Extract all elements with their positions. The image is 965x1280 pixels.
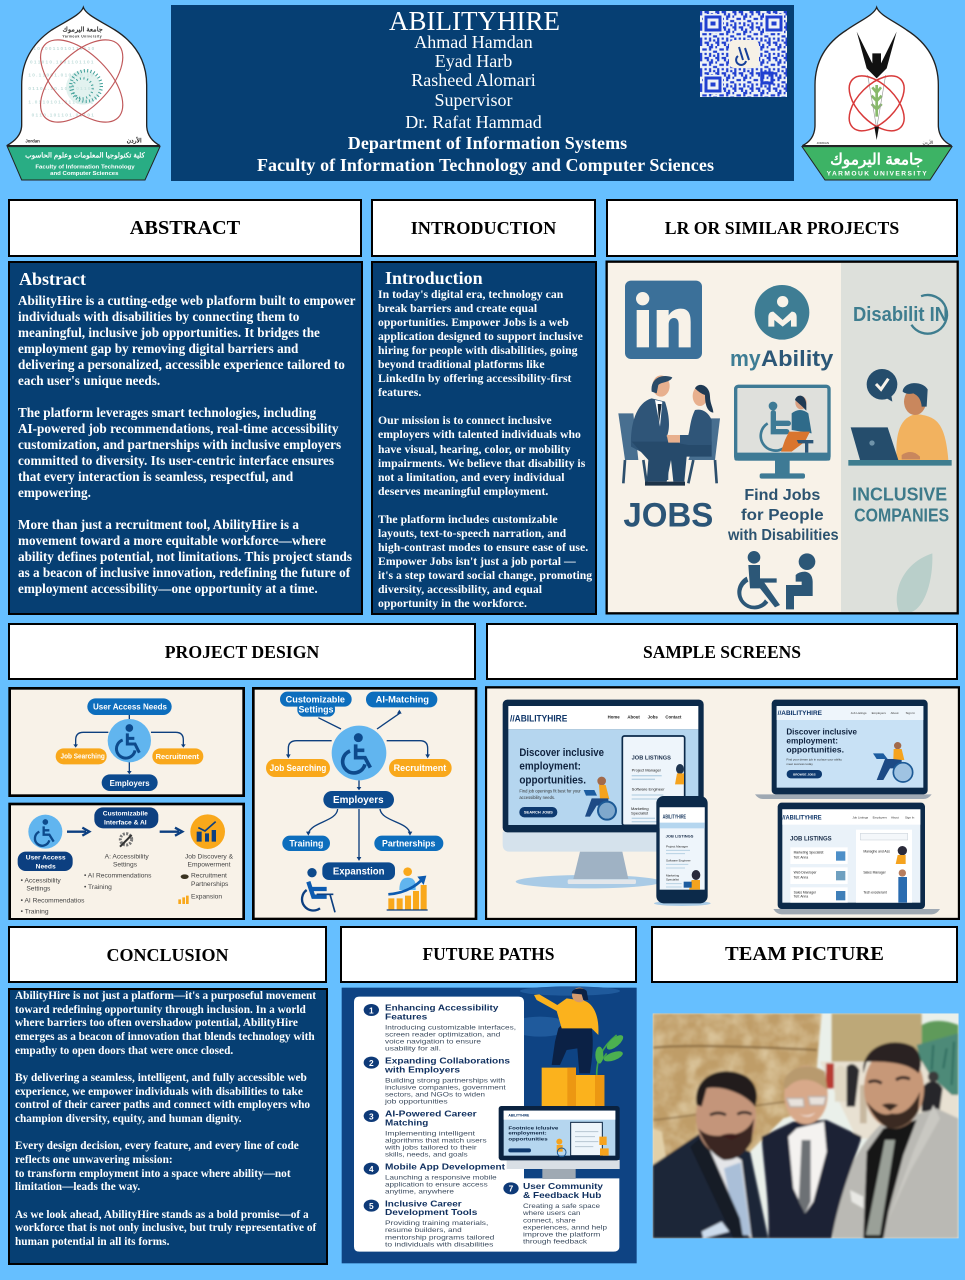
- item 7: community hub: User Community: [523, 1181, 603, 1191]
- panel: abstract text: [8, 261, 363, 615]
- item 3: AI matching: algorithms that match users: [385, 1137, 487, 1144]
- diagram: full feature map: Expanstion: [333, 867, 385, 878]
- desktop monitor mockup: JOB LISTINGS: [632, 756, 671, 762]
- icon: gear and wrench: [120, 834, 132, 845]
- phone mockup: Software Engineer: [666, 859, 691, 863]
- second laptop mockup: Tell: Anna: [794, 855, 808, 859]
- second laptop mockup: Tech excelerant: [863, 891, 887, 895]
- heading: future paths: [340, 926, 637, 983]
- item 4: mobile app: application to ensure access: [385, 1182, 488, 1189]
- diagram: full feature map: Employers: [333, 795, 384, 806]
- heading: introduction: [371, 199, 596, 257]
- logo: faculty emblem: جامعة اليرموك: [62, 26, 103, 34]
- heading: project design: PROJECT DESIGN: [165, 642, 319, 662]
- heading: conclusion: CONCLUSION: [106, 945, 229, 965]
- heading: conclusion: [8, 926, 327, 983]
- logo: faculty emblem: Faculty of Information Technology: [35, 164, 135, 170]
- item 7: community hub: experiences, annd help: [523, 1225, 607, 1232]
- item 1: accessibility features: screen reader optimization, and: [385, 1031, 501, 1038]
- heading: project design: [8, 623, 476, 680]
- header banner: [171, 5, 794, 181]
- panel: conclusion text: [8, 988, 328, 1265]
- heading: sample screens: [486, 623, 958, 680]
- label: find jobs for people with disabilities: [727, 487, 839, 544]
- diagram: three-step flow: • AI Recommendatios: [21, 897, 85, 904]
- logo: faculty emblem: الأردن: [127, 135, 142, 144]
- authors and supervisor: Supervisor: [434, 90, 512, 110]
- wheelchair user: [597, 777, 606, 785]
- phone mockup: ABILITYHIRE: [663, 815, 686, 821]
- desktop monitor mockup: Home: [608, 714, 620, 719]
- background building and courtyard: [832, 1013, 922, 1063]
- conclusion body: AbilityHire is not just a platform—it's a purposeful movement toward redefining opportunity through inclusion. In a world where barriers too often overshadow potential, AbilityHire emerges as a beacon of innovation that blends technology with empathy to open doors that were once closed. By delivering a seamless, intelligent, and fully accessible web experience, we empower individuals with disabilities to take control of their career paths and connect with employers who champion diversity, equity, and human dignity. Every design decision, every feature, and every line of code reflects one unwavering mission: to transform employment into a space where ability—not limitation—leads the way. As we look ahead, AbilityHire stands as a bold promise—of a workforce that is not only inclusive, but truly representative of human potential in all its forms.: [15, 990, 316, 1248]
- desktop monitor mockup: Jobs: [648, 714, 658, 719]
- item 1: accessibility features: Introducing customizable interfaces,: [385, 1024, 516, 1031]
- introduction body: In today's digital era, technology can break barriers and create equal opportunities. Empower Jobs is a web application designed to support inclusive hiring for people with disabilities, going beyond traditional platforms like LinkedIn by offering accessibility-first features. Our mission is to connect inclusive employers with talented individuals who have visual, hearing, color, or mobility impairments. We believe that disability is not a limitation, and every individual deserves meaningful employment. The platform includes customizable layouts, text-to-speech narration, and high-contrast modes to ensure ease of use. Empower Jobs isn't just a job portal — it's a step toward social change, promoting diversity, accessibility, and equal opportunity in the workforce.: [378, 288, 592, 610]
- diagram: full feature map: Recruitment: [394, 763, 446, 773]
- diagram: three-step flow: Recruitment: [191, 873, 227, 880]
- item 4: mobile app: 4: [369, 1164, 374, 1174]
- stone wall: [653, 1013, 827, 1165]
- heading: introduction: INTRODUCTION: [411, 218, 556, 238]
- white list card: [354, 997, 619, 1252]
- authors and supervisor: [405, 32, 542, 132]
- logo: faculty emblem: 0 1 1 0 1 . 1 0 . 1 0 0 1 0 1 1 0 1: [28, 86, 95, 91]
- label: find jobs for people with disabilities: with Disabilities: [727, 527, 839, 544]
- future paths infographic: [342, 986, 637, 1264]
- desktop monitor mockup: accessibility needs.: [519, 795, 555, 800]
- red orbits: [839, 66, 914, 141]
- logo: faculty emblem: 0 1 1 0 . 1 0 1 1 0 1 . 0 1 1 0 1: [32, 113, 94, 118]
- middle man: [762, 1120, 862, 1238]
- laptop mockup: About: [891, 711, 899, 715]
- diagram: three-step flow: Empowerment: [188, 862, 231, 869]
- diagram: three-step flow: Partnerships: [191, 881, 229, 888]
- laptop mockup: Discover inclusive: [786, 728, 858, 737]
- item 7: community hub: [503, 1181, 607, 1246]
- logo: faculty emblem: [6, 5, 161, 180]
- logo: faculty emblem: 1 . 0 1 1 0 1 0 1 . 0 1 1 0 1 0 . 1: [28, 99, 93, 104]
- laptop mockup: [755, 700, 932, 799]
- desktop monitor mockup: SEARCH JOBS: [524, 810, 553, 815]
- item 2: collaborations: job opportunities: [384, 1099, 449, 1106]
- item 5: career tools: Inclusive Career: [385, 1198, 462, 1208]
- diagram: full feature map: AI-Matching: [376, 694, 429, 704]
- torch: [857, 32, 897, 78]
- second laptop mockup: Marketing Specialist: [794, 850, 824, 854]
- label: find jobs for people with disabilities: Find Jobs: [744, 487, 820, 504]
- item 5: career tools: Development Tools: [385, 1207, 478, 1217]
- atom orbits: [26, 26, 137, 136]
- icon: wheelchair: [116, 726, 139, 758]
- label: inclusive companies: INCLUSIVE: [852, 485, 947, 505]
- item 4: mobile app: Mobile App Development: [385, 1161, 505, 1171]
- diagram: three-step flow: Settings: [113, 862, 138, 869]
- department and faculty: Faculty of Information Technology and Computer Sciences: [257, 155, 714, 175]
- item 7: community hub: 7: [509, 1184, 514, 1194]
- diagram: three-step flow: • Accessibility: [21, 878, 61, 885]
- item 1: accessibility features: Features: [385, 1011, 428, 1021]
- second laptop mockup: Web Developer: [794, 870, 817, 874]
- phone mockup: JOB LISTINGS: [666, 834, 694, 839]
- phone mockup: [654, 796, 711, 906]
- item 2: collaborations: inclusive companies, government: [385, 1084, 506, 1091]
- laptop mockup: meet success today: [786, 762, 813, 766]
- phone mockup: Project Manager: [666, 844, 688, 848]
- authors and supervisor: Eyad Harb: [435, 51, 512, 71]
- department and faculty: Department of Information Systems: [348, 133, 627, 153]
- heading: sample screens: SAMPLE SCREENS: [643, 642, 801, 662]
- illustration: monitor with wheelchair user: [734, 386, 830, 479]
- diagram: three-step flow: • Training: [84, 884, 112, 891]
- item 1: accessibility features: 1: [369, 1005, 374, 1015]
- label: find jobs for people with disabilities: for People: [741, 507, 824, 524]
- second laptop mockup: About: [891, 816, 899, 820]
- item 4: mobile app: anytime, anywhere: [385, 1189, 454, 1196]
- item 3: AI matching: Matching: [385, 1117, 428, 1127]
- item 5: career tools: mentorship programs tailored: [385, 1234, 495, 1241]
- item 3: AI matching: Implementing intelligent: [385, 1130, 475, 1137]
- diagram: three-step flow: Needs: [36, 864, 56, 871]
- logo: Yarmouk University emblem: [801, 5, 953, 180]
- item 4: mobile app: Launching a responsive mobile: [385, 1174, 497, 1181]
- illustration: person on podium: [534, 988, 625, 1107]
- desktop monitor mockup: Contact: [665, 714, 682, 719]
- logo: faculty emblem: Yarmouk University: [62, 34, 102, 38]
- icon: leaf: [897, 553, 932, 612]
- label: inclusive companies: COMPANIES: [854, 506, 949, 526]
- item 5: career tools: to individuals with disabilities: [385, 1242, 494, 1249]
- diagram: three-step flow: Job Discovery &: [185, 853, 234, 860]
- diagram: three-step flow: • AI Recommendations: [84, 873, 152, 880]
- DisabilityIN logo: Disabilit IN: [853, 304, 948, 326]
- heading: future paths: FUTURE PATHS: [422, 944, 555, 964]
- diagram: three-step flow: A: Accessibility: [105, 853, 149, 860]
- diagram: three-step flow: Interface & AI: [104, 819, 147, 826]
- diagram: full feature map: Customizable: [286, 694, 345, 704]
- item 1: accessibility features: [364, 1002, 516, 1053]
- diagram: three-step flow: Expansion: [191, 893, 222, 900]
- second laptop mockup: Managhe and Ass: [863, 850, 890, 854]
- diagram: full feature map: Job Searching: [270, 763, 327, 773]
- heading: team picture: [651, 926, 958, 983]
- project title: ABILITYHIRE: [389, 6, 560, 36]
- laptop mockup: Sign In: [906, 711, 915, 715]
- second laptop mockup: Tell: Anna: [794, 895, 808, 899]
- authors and supervisor: Dr. Rafat Hammad: [405, 112, 542, 132]
- panel: similar projects illustration: [606, 260, 959, 614]
- item 7: community hub: Creating a safe space: [523, 1203, 600, 1210]
- desktop monitor mockup: Marketing: [631, 806, 649, 811]
- department and faculty: [257, 133, 714, 175]
- phone mockup: Specialist: [666, 877, 679, 881]
- myAbility logo: [730, 285, 834, 371]
- item 3: AI matching: skills, needs, and goals: [385, 1152, 468, 1159]
- icon: wheelchair user at desk: [302, 868, 335, 912]
- diagram: three-step flow: Customizabile: [103, 810, 148, 817]
- item 2: collaborations: [364, 1055, 510, 1106]
- authors and supervisor: Rasheed Alomari: [411, 70, 536, 90]
- illustration: monitor: Footnice iclusive: [508, 1126, 559, 1132]
- QR code: [700, 11, 787, 97]
- second laptop mockup: Sales Manager: [794, 890, 817, 894]
- item 7: community hub: through feedback: [523, 1239, 588, 1246]
- authors and supervisor: Ahmad Hamdan: [414, 32, 533, 52]
- item 3: AI matching: with jobs tailored to their: [384, 1145, 478, 1152]
- label: inclusive companies: [852, 485, 949, 526]
- desktop monitor mockup: employment:: [519, 761, 581, 773]
- wheat stem: [872, 85, 882, 117]
- diagram: small flow: Recruitment: [156, 752, 199, 761]
- sample screens mockups: [485, 686, 960, 920]
- heading: LR or similar projects: [606, 199, 958, 257]
- laptop mockup: BROWSE JOBS: [793, 772, 816, 776]
- desktop monitor mockup: [503, 700, 704, 888]
- desktop monitor mockup: About: [627, 714, 640, 719]
- item 7: community hub: & Feedback Hub: [523, 1190, 601, 1200]
- right man: [833, 1108, 958, 1238]
- desktop monitor mockup: Find job openings fit best for your: [519, 789, 581, 794]
- illustration: monitor: ABILITYHIRE: [508, 1113, 530, 1117]
- item 7: community hub: improve the platform: [523, 1232, 601, 1239]
- logo: faculty emblem: 1 0 . 1 1 0 0 1 . 0 1 0 1 1 0 . 1 0: [28, 73, 93, 78]
- illustration: monitor: [499, 1106, 620, 1179]
- item 1: accessibility features: usability for all.: [385, 1046, 441, 1053]
- second laptop mockup: Job Listings: [852, 816, 869, 820]
- item 2: collaborations: sectors, and NGOs to widen: [385, 1092, 485, 1099]
- laptop mockup: employment:: [786, 736, 838, 745]
- label: JOBS: JOBS: [623, 497, 713, 535]
- LinkedIn logo: [625, 281, 702, 359]
- icon: wheelchair user and seated person: [737, 551, 815, 609]
- item 3: AI matching: 3: [369, 1111, 374, 1121]
- illustration: job interview: [618, 375, 720, 486]
- item 7: community hub: where users can: [522, 1210, 581, 1217]
- logo: faculty emblem: 1 0 1 0 0 1 1 0 1 0 1 1 0 1 1 0: [33, 46, 95, 51]
- desktop monitor mockup: Software Engineer: [632, 787, 665, 792]
- item 3: AI matching: [364, 1109, 487, 1159]
- illustration: monitor: employment:: [508, 1131, 547, 1137]
- diagram: small flow: Employers: [110, 778, 150, 788]
- diagram: full feature map: Partnerships: [382, 838, 435, 848]
- illustration: person at laptop: [848, 369, 952, 466]
- item 5: career tools: 5: [369, 1201, 374, 1211]
- diagram: three-step flow: User Access: [26, 855, 66, 862]
- heading: LR or similar projects: LR OR SIMILAR PROJECTS: [665, 218, 899, 238]
- logo: faculty emblem: كلية تكنولوجيا المعلومات وعلوم الحاسوب: [25, 152, 146, 160]
- item 1: accessibility features: voice navigation to ensure: [385, 1039, 481, 1046]
- diagram: small flow: User Access Needs: [93, 701, 167, 711]
- logo: Yarmouk University emblem: الأردن: [922, 139, 933, 145]
- diagram: full feature map: [253, 688, 476, 919]
- item 1: accessibility features: Enhancing Accessibility: [385, 1002, 499, 1012]
- diagram: small flow: [10, 688, 244, 796]
- introduction subheading: Introduction: [385, 268, 483, 288]
- item 3: AI matching: AI-Powered Career: [385, 1109, 477, 1119]
- icon: growth chart: [387, 867, 428, 910]
- heading: abstract: [8, 199, 362, 257]
- item 2: collaborations: Expanding Collaborations: [385, 1055, 510, 1065]
- item 4: mobile app: [364, 1161, 505, 1196]
- diagram: three-step flow: • Training: [21, 909, 49, 916]
- logo: Yarmouk University emblem: جامعة اليرموك: [830, 151, 923, 168]
- heading: team picture: TEAM PICTURE: [725, 943, 884, 965]
- panel: introduction text: [371, 261, 597, 615]
- item 2: collaborations: with Employers: [384, 1064, 460, 1074]
- phone mockup: Marketing: [666, 873, 680, 877]
- item 7: community hub: connect, share: [523, 1217, 576, 1224]
- second laptop mockup: [773, 803, 940, 914]
- laptop mockup: //ABILITYHIRE: [778, 711, 822, 717]
- myAbility logo: my: [730, 346, 761, 371]
- DisabilityIN logo: [853, 290, 952, 339]
- project design diagrams: [8, 687, 478, 920]
- laptop mockup: Find your dream job in a place your ability: [786, 758, 842, 762]
- team photo: [652, 1013, 959, 1238]
- abstract body: AbilityHire is a cutting-edge web platform built to empower individuals with disabilities by connecting them to meaningful, inclusive job opportunities. It bridges the employment gap by removing digital barriers and delivering a personalized, accessible experience tailored to each user's unique needs. The platform leverages smart technologies, including AI-powered job recommendations, real-time accessibility customization, and partnerships with inclusive employers committed to diversity. Its user-centric interface ensures that every interaction is seamless, respectful, and empowering. More than just a recruitment tool, AbilityHire is a movement toward a more equitable workforce—where ability defines potential, not limitations. This project stands as a beacon of inclusive innovation, redefining the future of employment accessibility—one opportunity at a time.: [18, 293, 355, 596]
- second laptop mockup: Sign In: [905, 816, 915, 820]
- second laptop mockup: Tell: Anna: [794, 875, 808, 879]
- diagram: three-step flow: [10, 804, 244, 919]
- diagram: full feature map: Training: [289, 838, 324, 848]
- icon: wheelchair: [343, 735, 370, 773]
- logo: faculty emblem: Jordan: [25, 138, 40, 143]
- desktop monitor mockup: Project Manager: [632, 768, 662, 773]
- abstract subheading: Abstract: [19, 269, 86, 289]
- desktop monitor mockup: opportunities.: [519, 774, 586, 786]
- logo: faculty emblem: 0 1 1 0 1 0 . 1 0 0 1 1 0 1 1 0 1: [30, 59, 94, 64]
- heading: abstract: ABSTRACT: [130, 216, 240, 238]
- diagram: full feature map: Settings: [298, 705, 334, 715]
- item 5: career tools: resume builders, and: [385, 1227, 462, 1234]
- logo: Yarmouk University emblem: YARMOUK UNIVERSITY: [827, 170, 927, 177]
- logo: faculty emblem: and Computer Sciences: [50, 171, 119, 177]
- logo: Yarmouk University emblem: JORDAN: [817, 141, 829, 145]
- diagram: three-step flow: Settings: [26, 886, 51, 893]
- left man: [653, 1133, 768, 1238]
- item 2: collaborations: Building strong partnerships with: [385, 1077, 505, 1084]
- laptop mockup: Employers: [872, 711, 886, 715]
- item 5: career tools: Providing training materials,: [385, 1220, 489, 1227]
- item 5: career tools: [364, 1198, 495, 1249]
- second laptop mockup: JOB LISTINGS: [790, 837, 832, 843]
- desktop monitor mockup: //ABILITYHIRE: [510, 714, 567, 724]
- second laptop mockup: Employers: [873, 816, 887, 820]
- diagram: small flow: Job Searching: [60, 753, 105, 760]
- desktop monitor mockup: Specialist: [631, 811, 649, 816]
- illustration: monitor: opportunities: [508, 1136, 548, 1142]
- laptop mockup: opportunities.: [786, 746, 844, 755]
- laptop mockup: Job Listings: [851, 711, 867, 715]
- item 2: collaborations: 2: [369, 1058, 374, 1068]
- second laptop mockup: Sales Manager: [863, 871, 887, 875]
- second laptop mockup: //ABILITYHIRE: [782, 816, 822, 822]
- myAbility logo: Ability: [761, 346, 834, 371]
- desktop monitor mockup: Discover inclusive: [519, 747, 604, 759]
